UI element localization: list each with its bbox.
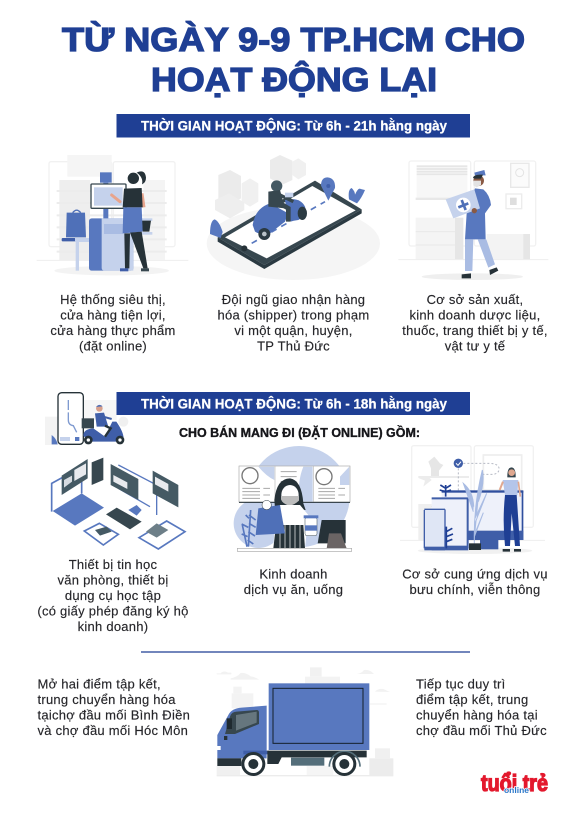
text: office equipment: kinh doanh) [78,619,148,634]
text: shippers: TP Thủ Đức [257,338,330,354]
text: office equipment: Thiết bị tin học [69,557,158,572]
text: supermarkets [50,292,176,354]
text: supermarkets: Hệ thống siêu thị, [60,292,166,307]
text: medical production: vật tư y tế [445,338,506,354]
text: keep transfer point: chuyển hàng hóa tại [416,708,538,722]
text: new transfer points: trung chuyển hàng hóa [38,692,176,707]
title: HOẠT ĐỘNG LẠI [151,60,437,99]
text: medical production: kinh doanh dược liệu, [410,308,540,322]
text: new transfer points: và chợ đầu mối Hóc Môn [38,723,188,738]
icon: delivery on phone [207,155,380,280]
text: medical production [402,292,548,354]
icon: supermarket cashier [37,155,188,275]
text: shippers: hóa (shipper) trong phạm [218,308,369,322]
icon: computers and office equipment [52,458,185,549]
text: post and telecom [402,566,548,597]
text: keep transfer point: chợ đầu mối Thủ Đức [416,723,547,738]
banner: hours 6h-18h [116,392,470,415]
text: keep transfer point: điểm tập kết, trung [416,692,528,707]
title [62,21,525,99]
text: new transfer points [38,676,190,738]
logo: Tuoi Tre Online: tuổi trẻ [481,770,548,796]
text: office equipment: văn phòng, thiết bị [58,572,168,588]
text: new transfer points: tạichợ đầu mối Bình Điền [38,708,190,722]
text: keep transfer point: Tiếp tục duy trì [416,676,506,692]
text: supermarkets: cửa hàng tiện lợi, [60,308,166,322]
title: TỪ NGÀY 9-9 TP.HCM CHO [62,21,525,59]
text: shippers: vi một quận, huyện, [234,323,353,338]
text: office equipment [37,557,189,634]
text: medical production: thuốc, trang thiết bị y tế, [402,323,548,338]
text: office equipment: dụng cụ học tập [65,588,161,603]
text: shippers: Đội ngũ giao nhận hàng [222,292,365,307]
text: new transfer points: Mở hai điểm tập kết, [38,676,161,692]
icon: food and beverage vendor [234,446,352,551]
text: office equipment: (có giấy phép đăng ký hộ [37,604,189,618]
text: post and telecom: bưu chính, viễn thông [409,582,541,597]
text: keep transfer point [416,676,547,738]
text: food and beverage: dịch vụ ăn, uống [244,582,343,597]
text: food and beverage: Kinh doanh [259,566,328,582]
subheading: takeaway: CHO BÁN MANG ĐI (ĐẶT ONLINE) GỒM: [179,425,420,440]
text: supermarkets: (đặt online) [79,338,147,354]
text: shippers [218,292,369,354]
text: food and beverage [244,566,343,597]
banner: hours 6h-18h: THỜI GIAN HOẠT ĐỘNG: Từ 6h - 18h hằng ngày [141,396,447,412]
icon: truck [217,667,393,776]
banner: hours 6h-21h: THỜI GIAN HOẠT ĐỘNG: Từ 6h - 21h hằng ngày [141,118,447,134]
text: post and telecom: Cơ sở cung ứng dịch vụ [402,566,548,582]
icon: post and telecom services [400,446,545,554]
icon: delivery scooter and phone [45,393,128,445]
text: supermarkets: cửa hàng thực phẩm [50,323,176,338]
icon: medical worker [398,161,548,280]
text: medical production: Cơ sở sản xuất, [427,292,523,307]
banner: hours 6h-21h [116,114,470,138]
logo: Tuoi Tre Online: online [504,786,530,795]
